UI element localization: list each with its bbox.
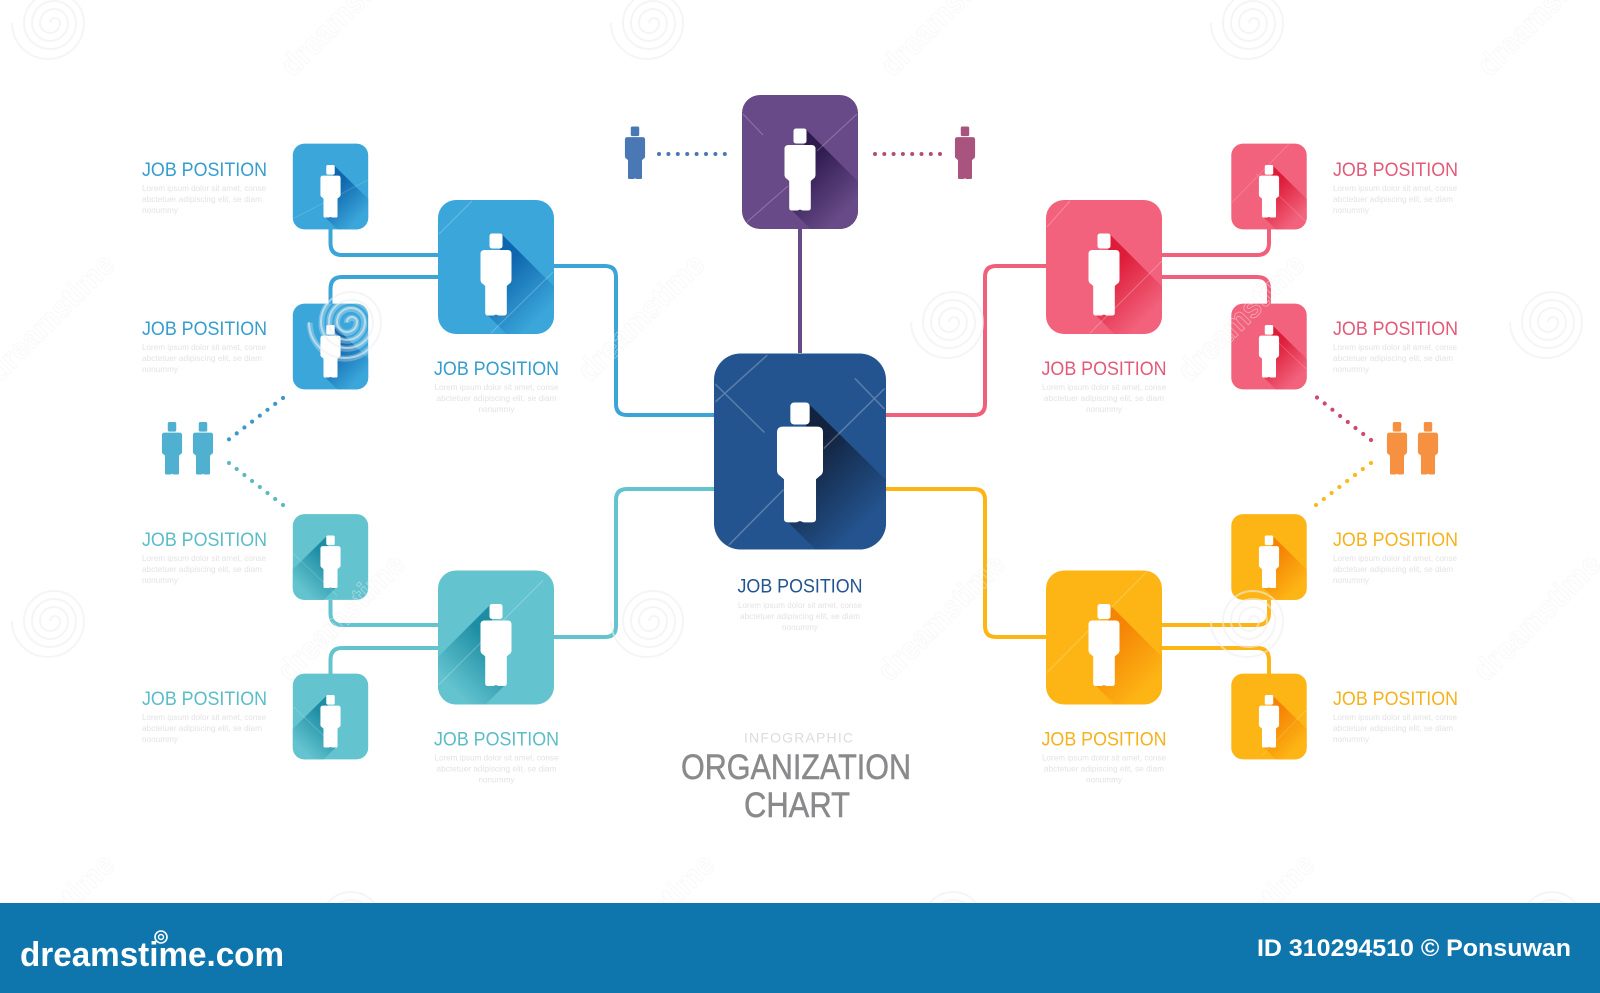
text block: blue small 1	[142, 160, 267, 215]
text block: red large: abctetuer adipiscing elit, se diam	[1044, 393, 1164, 403]
icon: right pair of figures	[1387, 422, 1438, 475]
text block: blue large	[434, 359, 559, 414]
text block: yellow small 2: JOB POSITION	[1333, 689, 1458, 710]
text block: yellow large: JOB POSITION	[1042, 730, 1166, 750]
tile: teal small 2	[292, 674, 368, 760]
text block: red large: JOB POSITION	[1042, 359, 1166, 380]
text block: teal large: abctetuer adipiscing elit, se diam	[436, 764, 556, 774]
footer banner	[0, 903, 1600, 993]
text block: blue small 1: abctetuer adipiscing elit, se diam	[142, 194, 262, 204]
text block: central	[738, 576, 862, 632]
text block: red small 2	[1333, 319, 1458, 374]
connector: centre to top manager	[798, 228, 802, 353]
tile: teal small 1	[292, 514, 368, 600]
text block: red small 2: nonummy	[1333, 364, 1370, 374]
text block: central: JOB POSITION	[738, 576, 862, 598]
text block: yellow small 1: Lorem ipsum dolor sit amet, conse	[1333, 553, 1457, 563]
text block: teal small 2: nonummy	[142, 734, 179, 744]
text block: blue small 1: Lorem ipsum dolor sit amet, conse	[142, 183, 266, 193]
text block: teal small 1: nonummy	[142, 575, 179, 585]
connectors: blue branch	[330, 229, 438, 304]
text block: teal large	[434, 730, 559, 784]
text block: yellow small 1: nonummy	[1333, 575, 1370, 585]
text block: teal small 2: abctetuer adipiscing elit, se diam	[142, 723, 262, 733]
footer image id: ID 310294510 © Ponsuwan	[1257, 935, 1571, 962]
text block: yellow small 1: JOB POSITION	[1333, 530, 1458, 551]
title: INFOGRAPHIC	[744, 730, 853, 746]
text block: yellow large: Lorem ipsum dolor sit amet, conse	[1042, 752, 1166, 762]
footer logo spiral	[155, 931, 167, 943]
text block: blue small 1: JOB POSITION	[142, 160, 267, 181]
text block: blue large: abctetuer adipiscing elit, se diam	[436, 393, 556, 403]
connector: centre to yellow	[886, 489, 1046, 637]
text block: yellow large: nonummy	[1086, 774, 1123, 784]
text block: red small 1: nonummy	[1333, 205, 1370, 215]
tile: blue large	[438, 200, 554, 334]
connector: centre to teal	[553, 489, 714, 637]
dotted link: left lower	[227, 461, 285, 507]
connector: centre to red	[886, 266, 1046, 415]
dotted link: right upper	[1315, 395, 1373, 442]
text block: red large: Lorem ipsum dolor sit amet, conse	[1042, 382, 1166, 392]
text block: red small 2: JOB POSITION	[1333, 319, 1458, 340]
text block: teal small 1: JOB POSITION	[142, 530, 267, 551]
text block: blue small 2: Lorem ipsum dolor sit amet, conse	[142, 342, 266, 352]
watermark: dreamstime	[270, 547, 412, 688]
text block: teal large: nonummy	[478, 774, 515, 784]
text block: red small 1: abctetuer adipiscing elit, se diam	[1333, 194, 1453, 204]
text block: blue small 1: nonummy	[142, 205, 179, 215]
text block: blue small 2: JOB POSITION	[142, 319, 267, 340]
connectors: yellow branch	[1162, 600, 1269, 674]
dotted link: blue assistant	[657, 152, 727, 156]
tile: blue small 2	[292, 304, 368, 390]
tile: yellow small 1	[1231, 514, 1307, 600]
watermark: dreamstime	[570, 247, 712, 388]
title: ORGANIZATION	[681, 748, 911, 787]
text block: red small 1: JOB POSITION	[1333, 160, 1458, 181]
watermark: dreamstime	[580, 847, 722, 988]
icon: left pair of figures	[162, 422, 213, 475]
tile: red small 2	[1231, 304, 1307, 390]
text block: blue small 2: abctetuer adipiscing elit, se diam	[142, 353, 262, 363]
tile: yellow large	[1046, 570, 1162, 704]
icon: plum assistant figure	[955, 127, 975, 179]
text block: blue small 2	[142, 319, 267, 374]
text block: blue large: JOB POSITION	[434, 359, 559, 380]
tile: teal large	[438, 570, 554, 704]
text block: teal small 1: Lorem ipsum dolor sit amet, conse	[142, 553, 266, 563]
footer logo text: dreamstime.com	[20, 936, 284, 974]
connector: centre to blue	[553, 266, 714, 415]
text block: yellow small 2: abctetuer adipiscing elit, se diam	[1333, 723, 1453, 733]
tile: red small 1	[1231, 144, 1307, 230]
text block: blue small 2: nonummy	[142, 364, 179, 374]
dotted link: right lower	[1314, 461, 1373, 507]
text block: yellow small 1: abctetuer adipiscing elit, se diam	[1333, 564, 1453, 574]
text block: red large: nonummy	[1086, 404, 1123, 414]
text block: teal small 2: JOB POSITION	[142, 689, 267, 710]
text block: central: Lorem ipsum dolor sit amet, conse	[738, 600, 862, 610]
watermark: dreamstime	[1170, 247, 1312, 388]
text block: red small 2: abctetuer adipiscing elit, se diam	[1333, 353, 1453, 363]
text block: blue large: Lorem ipsum dolor sit amet, conse	[434, 382, 559, 392]
tile: blue small 1	[292, 144, 368, 230]
dotted link: left upper	[227, 396, 285, 441]
text block: blue large: nonummy	[478, 404, 515, 414]
tile: top manager	[742, 95, 858, 229]
text block: yellow large: abctetuer adipiscing elit, se diam	[1044, 764, 1164, 774]
connectors: red branch	[1162, 229, 1269, 304]
text block: teal large: JOB POSITION	[434, 730, 559, 750]
text block: red large	[1042, 359, 1166, 414]
icon: blue assistant figure	[625, 127, 645, 179]
tile: yellow small 2	[1231, 674, 1307, 760]
text block: central: nonummy	[782, 622, 819, 632]
text block: teal small 1	[142, 530, 267, 585]
title: CHART	[744, 786, 850, 825]
connectors: teal branch	[330, 600, 438, 674]
text block: teal small 1: abctetuer adipiscing elit, se diam	[142, 564, 262, 574]
watermark: dreamstime	[870, 547, 1012, 688]
dotted link: plum assistant	[873, 152, 942, 156]
text block: yellow small 2	[1333, 689, 1458, 744]
watermark: dreamstime	[1180, 847, 1322, 988]
text block: teal large: Lorem ipsum dolor sit amet, conse	[434, 752, 559, 762]
text block: teal small 2: Lorem ipsum dolor sit amet, conse	[142, 712, 266, 722]
tile: red large	[1046, 200, 1162, 334]
text block: central: abctetuer adipiscing elit, se diam	[740, 611, 860, 621]
title	[681, 730, 911, 825]
watermark spiral over tile	[306, 304, 368, 362]
text block: yellow small 2: Lorem ipsum dolor sit amet, conse	[1333, 712, 1457, 722]
tile: central job position	[714, 354, 886, 550]
text block: teal small 2	[142, 689, 267, 744]
text block: yellow small 2: nonummy	[1333, 734, 1370, 744]
text block: yellow large	[1042, 730, 1166, 784]
text block: red small 1: Lorem ipsum dolor sit amet, conse	[1333, 183, 1457, 193]
text block: red small 1	[1333, 160, 1458, 215]
text block: yellow small 1	[1333, 530, 1458, 585]
text block: red small 2: Lorem ipsum dolor sit amet, conse	[1333, 342, 1457, 352]
